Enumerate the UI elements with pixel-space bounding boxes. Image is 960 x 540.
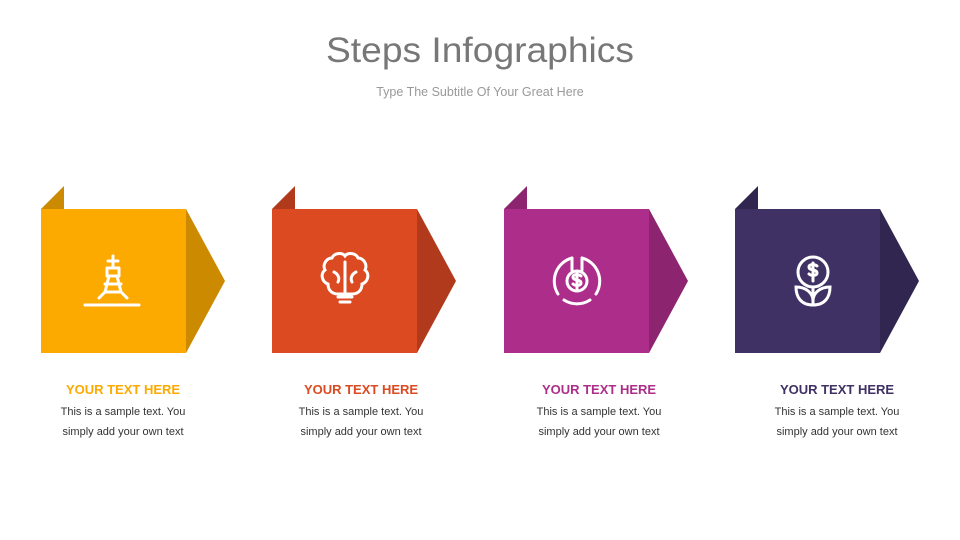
text block 3: This is a sample text. You xyxy=(537,406,661,418)
text block 3 xyxy=(537,382,661,438)
text block 2 xyxy=(299,382,423,438)
text block 2: YOUR TEXT HERE xyxy=(304,382,418,397)
text block 4: simply add your own text xyxy=(776,426,898,438)
text block 1: This is a sample text. You xyxy=(61,406,185,418)
title: Steps Infographics xyxy=(326,31,634,70)
text block 4: This is a sample text. You xyxy=(775,406,899,418)
icon: brain xyxy=(322,254,368,302)
text block 1: YOUR TEXT HERE xyxy=(66,382,180,397)
text block 4: YOUR TEXT HERE xyxy=(780,382,894,397)
subtitle: Type The Subtitle Of Your Great Here xyxy=(376,85,584,99)
text block 3: simply add your own text xyxy=(538,426,660,438)
icon: dollar chart xyxy=(554,258,600,304)
icon: chess king xyxy=(85,256,139,305)
text block 1: simply add your own text xyxy=(62,426,184,438)
step 3 card xyxy=(504,186,688,353)
text block 4 xyxy=(775,382,899,438)
step 1 card xyxy=(41,186,225,353)
text block 2: simply add your own text xyxy=(300,426,422,438)
text block 3: YOUR TEXT HERE xyxy=(542,382,656,397)
step 4 card xyxy=(735,186,919,353)
step 2 card xyxy=(272,186,456,353)
text block 1 xyxy=(61,382,185,438)
icon: money plant xyxy=(796,257,830,305)
text block 2: This is a sample text. You xyxy=(299,406,423,418)
